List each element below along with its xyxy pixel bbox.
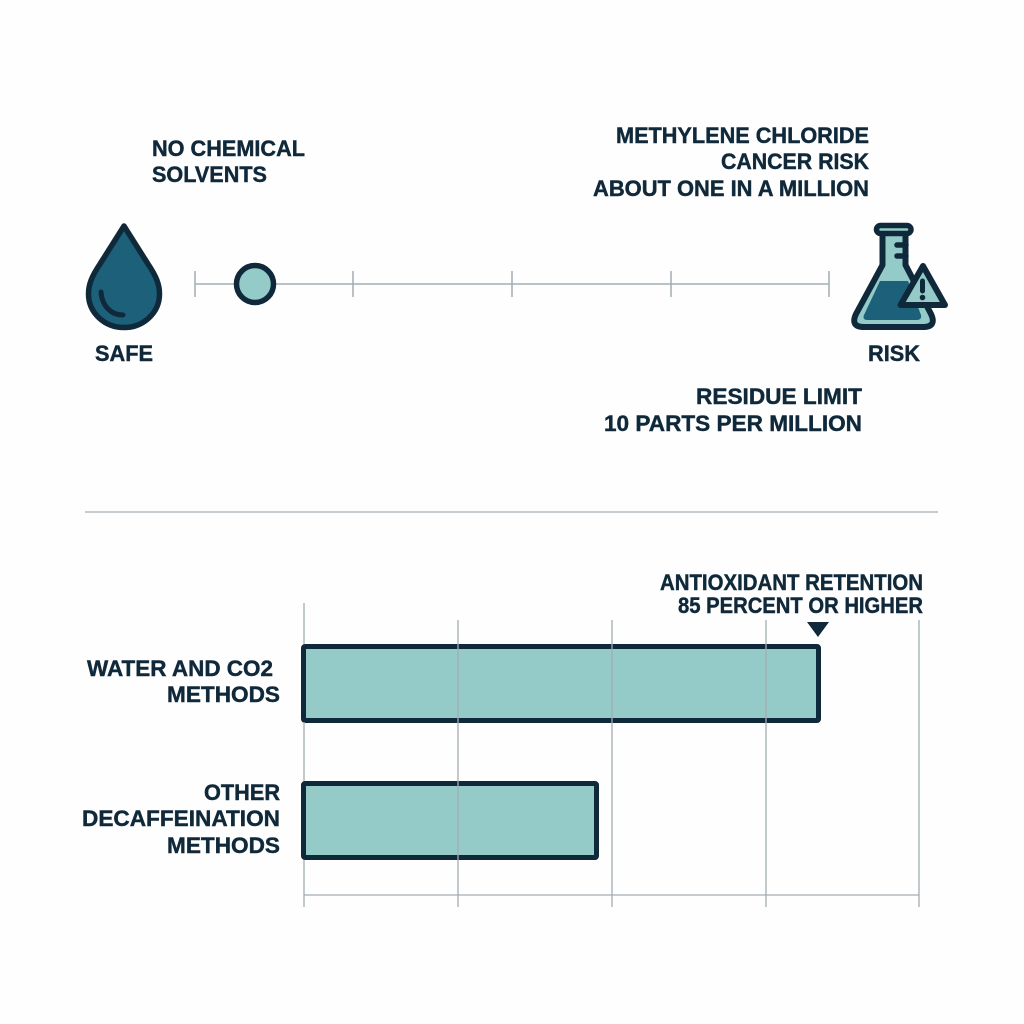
- label: other decaffeination methods: DECAFFEINATION: [82, 806, 280, 831]
- label: other decaffeination methods: OTHER: [204, 780, 280, 805]
- safety scale: [195, 266, 829, 302]
- bar: other decaffeination methods: [304, 784, 596, 858]
- callout: methylene chloride cancer risk: CANCER RISK: [721, 149, 870, 174]
- bar: water and CO2 methods: [304, 646, 818, 720]
- label: water and CO2 methods: WATER AND CO2: [87, 656, 273, 681]
- bar chart: [304, 603, 919, 907]
- callout: no chemical solvents: SOLVENTS: [152, 162, 267, 187]
- icon: water drop: [88, 226, 160, 328]
- label: water and CO2 methods: METHODS: [167, 682, 280, 707]
- label: other decaffeination methods: METHODS: [167, 833, 280, 858]
- label: safe: SAFE: [95, 341, 153, 366]
- callout: no chemical solvents: [152, 136, 305, 187]
- icon: retention marker: [807, 622, 829, 637]
- callout: methylene chloride cancer risk: ABOUT ONE IN A MILLION: [593, 176, 869, 201]
- callout: residue limit: 10 PARTS PER MILLION: [604, 411, 862, 436]
- callout: methylene chloride cancer risk: METHYLENE CHLORIDE: [616, 123, 869, 148]
- callout: antioxidant retention: [660, 570, 923, 618]
- label: risk: RISK: [868, 341, 921, 366]
- icon: flask with warning triangle: [854, 226, 945, 327]
- callout: residue limit: [604, 384, 862, 436]
- callout: residue limit: RESIDUE LIMIT: [696, 384, 862, 409]
- callout: no chemical solvents: NO CHEMICAL: [152, 136, 305, 161]
- callout: antioxidant retention: ANTIOXIDANT RETENTION: [660, 570, 923, 595]
- callout: methylene chloride cancer risk: [593, 123, 870, 201]
- label: other decaffeination methods: [82, 780, 280, 858]
- scale marker: [236, 266, 274, 302]
- label: water and CO2 methods: [87, 656, 280, 707]
- callout: antioxidant retention: 85 PERCENT OR HIGHER: [678, 593, 923, 618]
